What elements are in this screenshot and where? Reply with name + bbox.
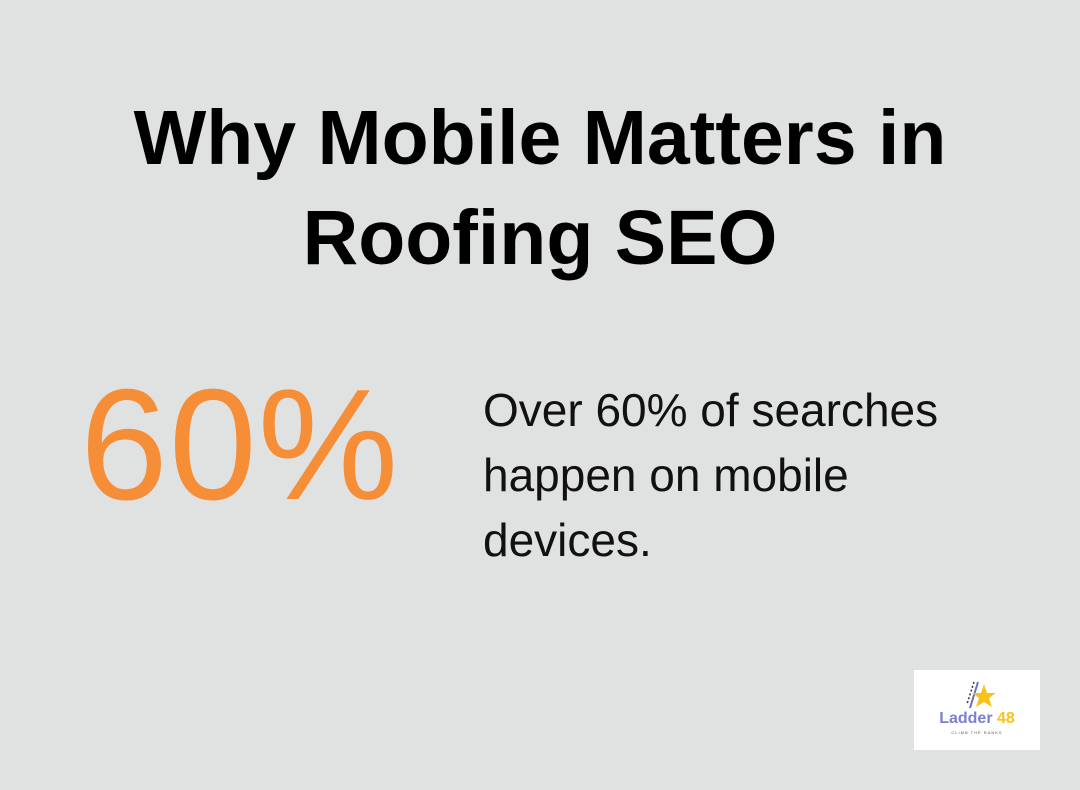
stat description: devices.: [483, 514, 652, 566]
stat description: [483, 384, 938, 566]
logo: [914, 670, 1040, 750]
title: Roofing SEO: [303, 195, 777, 281]
stat description: Over 60% of searches: [483, 384, 938, 436]
big stat: 60%: [80, 357, 399, 533]
icon: ladder star: [966, 682, 996, 708]
title: Why Mobile Matters in: [134, 95, 946, 181]
stat description: happen on mobile: [483, 449, 849, 501]
logo: CLIMB THE RANKS: [951, 730, 1003, 735]
logo text: Ladder 48: [939, 710, 1015, 727]
title: [134, 95, 946, 281]
